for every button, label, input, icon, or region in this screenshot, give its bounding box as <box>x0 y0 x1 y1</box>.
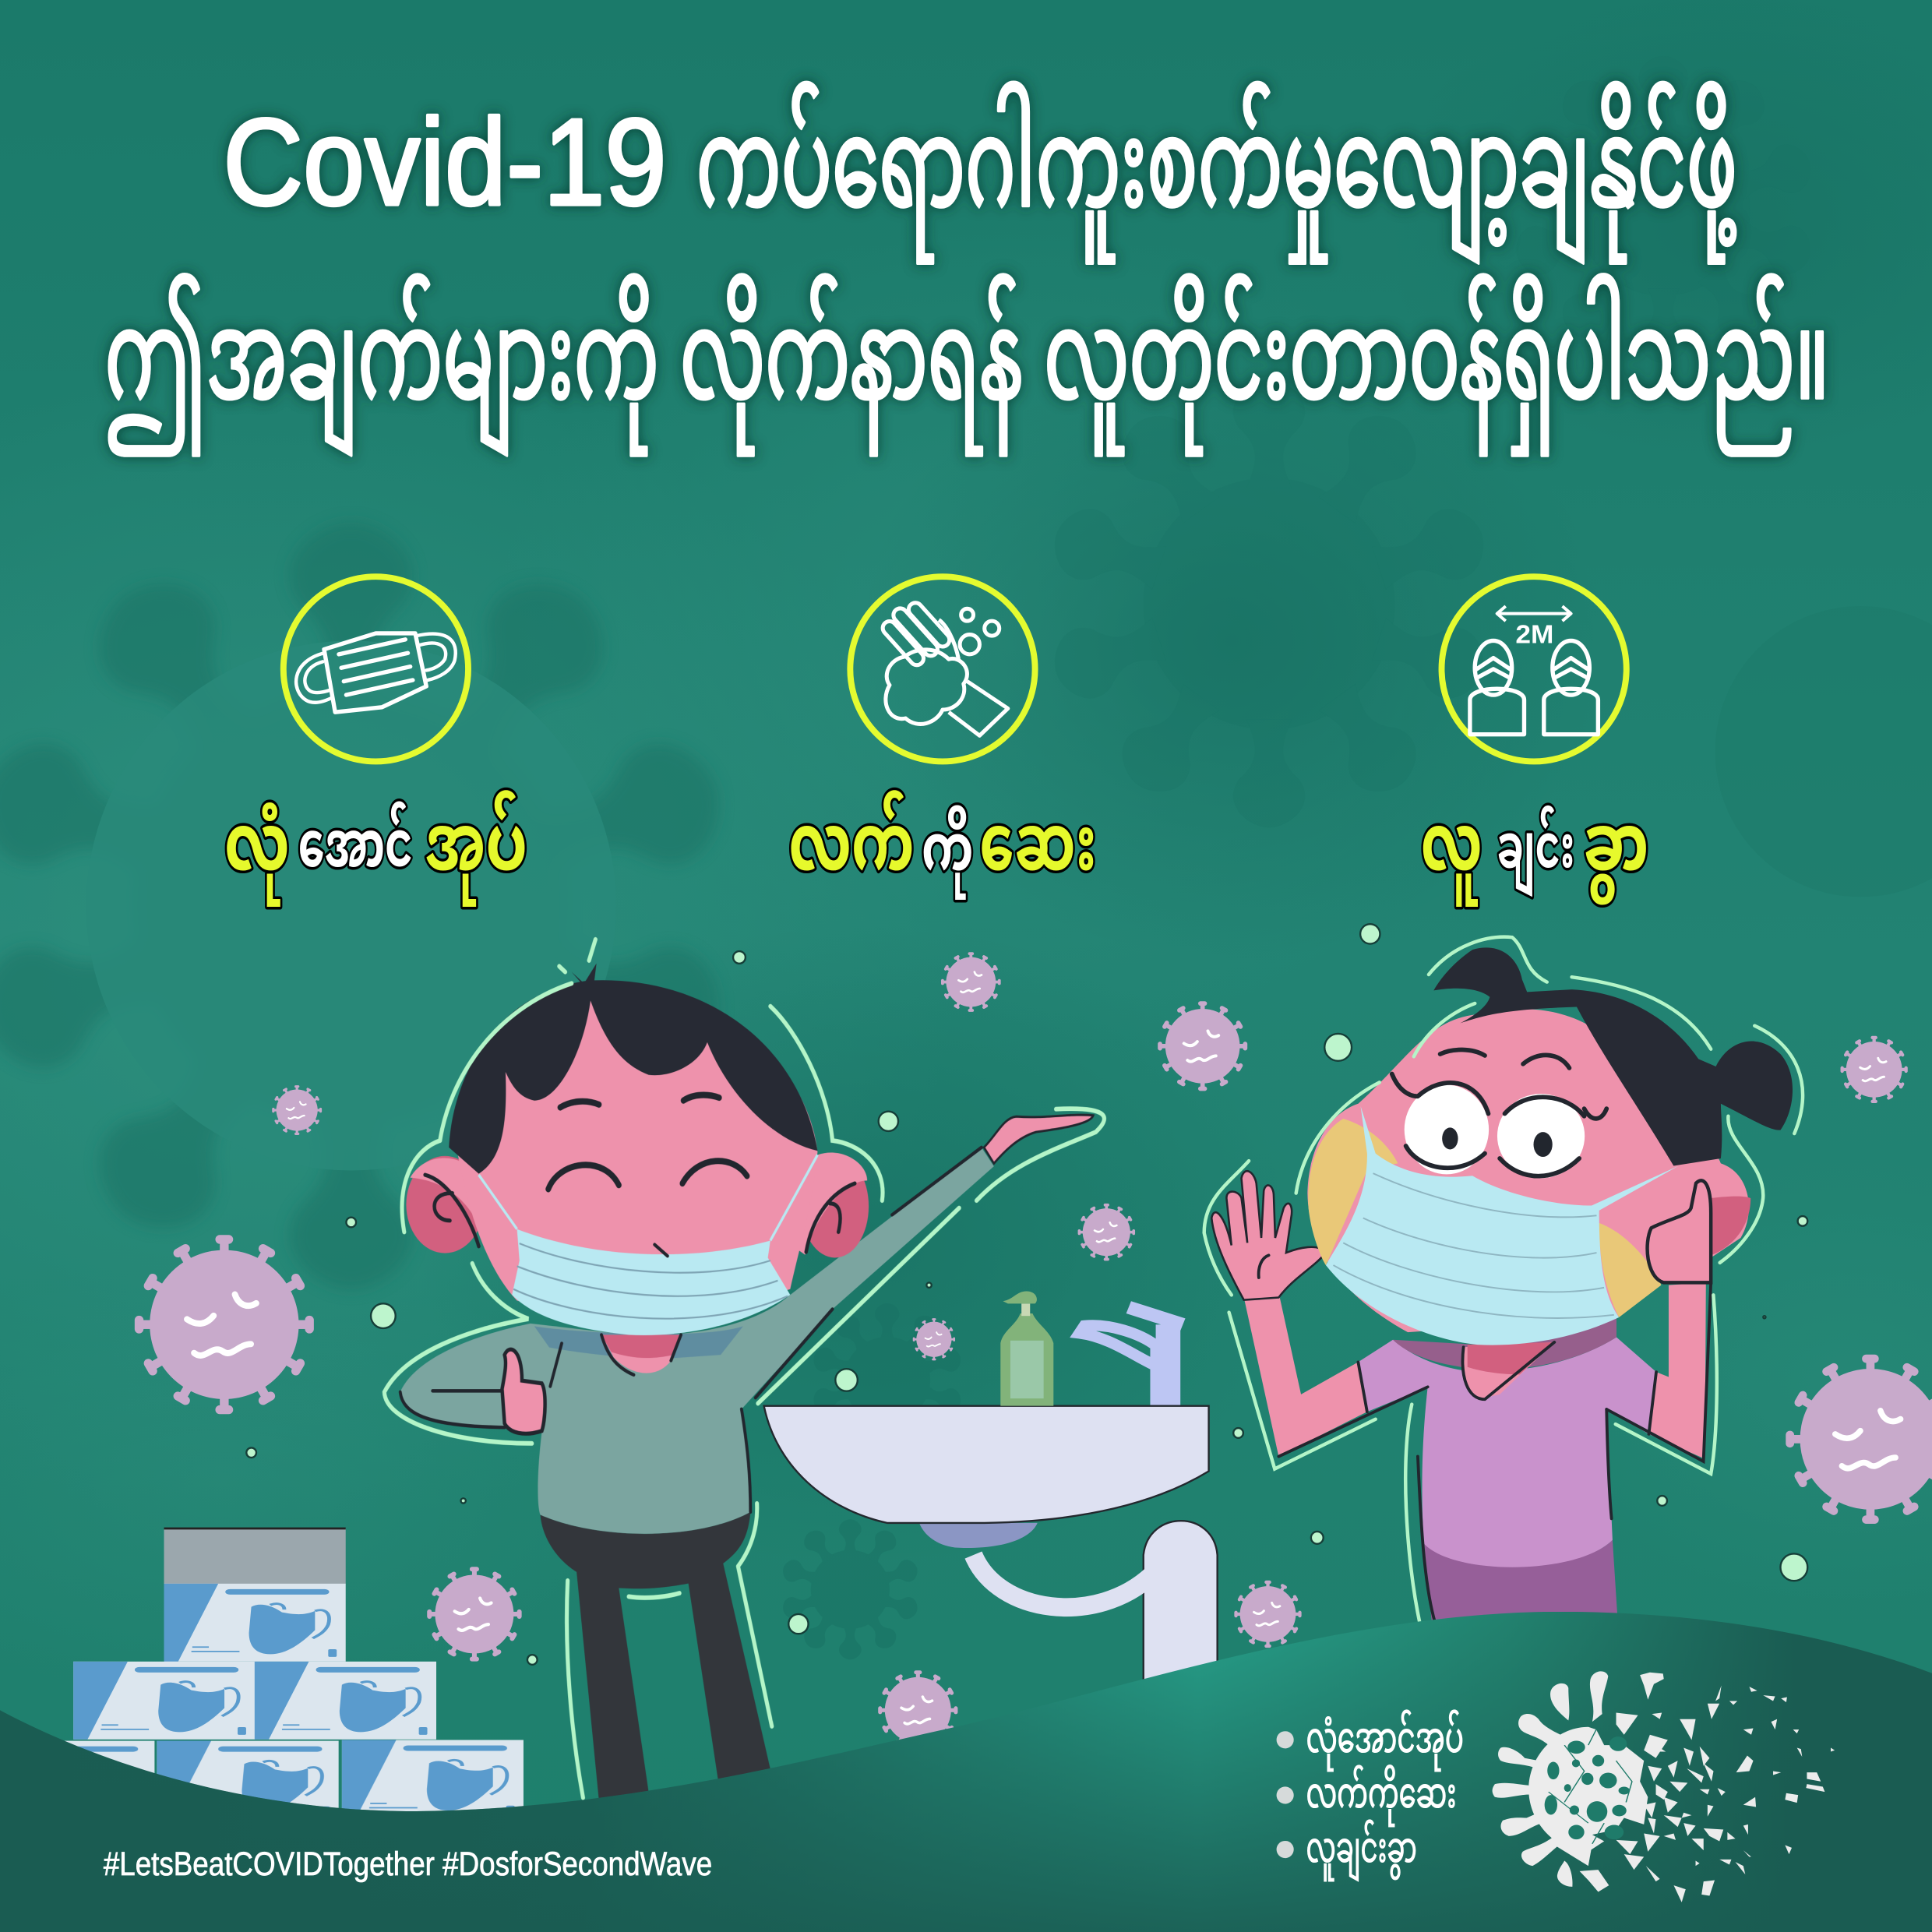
girl raised hand <box>1211 1171 1326 1300</box>
sink <box>764 1292 1218 1682</box>
boy ears <box>406 1156 484 1253</box>
icon: two metre distance: 2M <box>1515 621 1553 650</box>
bottom wave <box>0 1612 1932 1932</box>
label: wash hands: ဆေး <box>979 799 1097 887</box>
boy trousers <box>541 1512 770 1800</box>
girl hair <box>1433 947 1793 1166</box>
boy neck <box>601 1334 681 1373</box>
label: keep distance: ခွာ <box>1583 799 1648 904</box>
label: mask up <box>224 791 527 907</box>
shattered virus <box>1493 1671 1835 1902</box>
icon: washing hands <box>850 576 1035 761</box>
girl right arm <box>1648 1282 1706 1459</box>
purple viruses <box>135 952 1932 1750</box>
icon: two metre distance <box>1442 576 1627 761</box>
girl shirt <box>1358 1338 1656 1567</box>
girl eyes <box>1392 1050 1606 1178</box>
girl face <box>1307 1009 1749 1332</box>
boy green outline <box>384 940 1104 1798</box>
girl neck <box>1463 1342 1554 1399</box>
label: keep distance: လူ <box>1421 799 1482 907</box>
girl trousers <box>1424 1540 1619 1641</box>
label: keep distance <box>1421 799 1648 907</box>
icon: face mask <box>284 576 468 761</box>
label: mask up: လုံ <box>224 799 290 907</box>
boy mask <box>479 1155 817 1335</box>
checklist: လူချင်းခွာ <box>1306 1820 1417 1882</box>
girl cheeks <box>1308 1119 1398 1265</box>
boy hair <box>449 964 817 1174</box>
label: mask up: အောင် <box>298 802 413 880</box>
label: wash hands <box>788 791 1097 901</box>
hashtags: #LetsBeatCOVIDTogether #DosforSecondWave <box>104 1846 712 1883</box>
green particles <box>246 924 1807 1665</box>
girl dark strokes <box>1259 1255 1711 1623</box>
girl thumbs up <box>1648 1180 1711 1282</box>
title: Covid-19 <box>223 93 667 231</box>
checklist: လက်ကိုဆေး <box>1306 1765 1456 1827</box>
character: girl <box>1204 937 1803 1641</box>
boy sweater <box>400 1148 994 1534</box>
mask boxes <box>0 1528 524 1819</box>
label: wash hands: ကို <box>922 805 973 901</box>
girl mask <box>1326 1106 1679 1345</box>
title <box>104 83 1830 456</box>
boy face lines <box>425 1095 855 1256</box>
label: keep distance: ချင်း <box>1497 805 1574 897</box>
boy raised hand <box>984 1115 1093 1163</box>
boy dark strokes <box>400 1148 982 1512</box>
soap bottle <box>1000 1292 1053 1406</box>
girl left arm <box>1244 1292 1367 1457</box>
boy thumbs up <box>502 1349 545 1433</box>
checklist: လုံအောင်အုပ် <box>1306 1710 1464 1772</box>
girl green outline <box>1204 937 1803 1625</box>
checklist <box>1277 1710 1464 1882</box>
boy face <box>457 986 817 1334</box>
label: mask up: အုပ် <box>425 791 527 907</box>
character: boy <box>384 940 1104 1800</box>
label: wash hands: လက် <box>788 791 915 887</box>
